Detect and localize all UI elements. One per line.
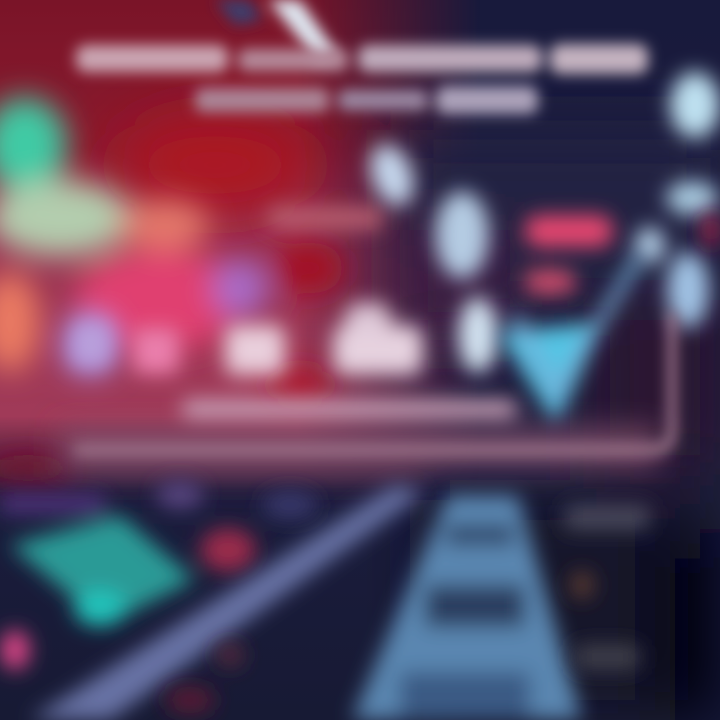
diagonal perspective beam — [30, 485, 425, 720]
frame: horizontal rail with right upturn — [0, 428, 660, 484]
bright central cards — [72, 207, 517, 420]
right side dim labels — [165, 505, 650, 714]
edge-safe colour field — [0, 0, 480, 490]
chart: cyan V shape — [498, 255, 640, 425]
title: illegible blurred heading lines — [76, 44, 648, 114]
bottom left teal panel — [0, 481, 318, 670]
background colour fields — [115, 115, 720, 720]
tower structure, bottom centre — [352, 495, 582, 720]
floating icons right — [362, 72, 720, 373]
pink labels — [525, 212, 719, 294]
ceiling light streak — [215, 0, 338, 62]
left glow panel — [0, 97, 344, 482]
